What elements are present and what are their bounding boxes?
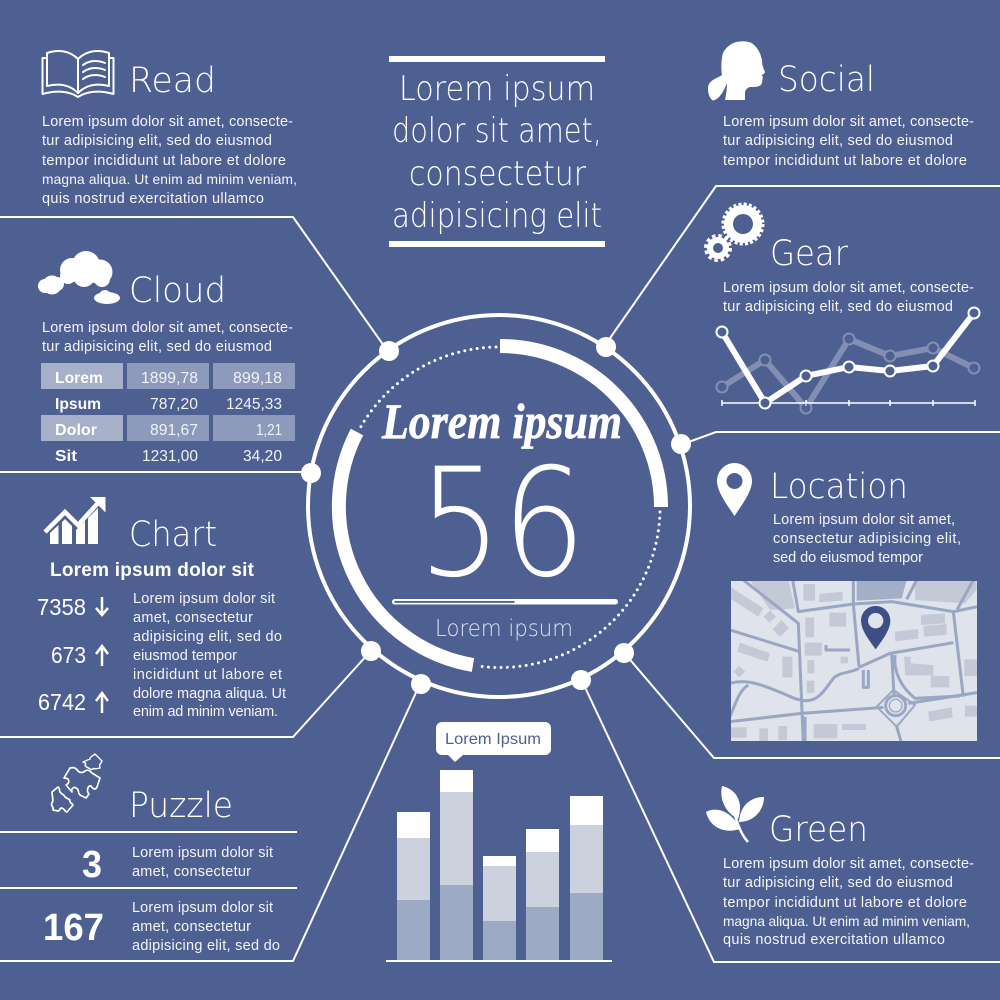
body text: chart: Lorem ipsum dolor sit — [133, 591, 275, 607]
icon: leaves — [706, 786, 764, 842]
body text: social: tempor incididunt ut labore et dolore — [723, 153, 967, 169]
stat: 3: 3 — [82, 844, 102, 886]
statistics with arrows: 7358 — [37, 594, 86, 620]
body text: read: tur adipisicing elit, sed do eiusmod — [42, 133, 272, 149]
data table: 891,67 — [150, 422, 198, 439]
progress bar — [392, 599, 618, 604]
body text: read: magna aliqua. Ut enim ad minim veniam, — [42, 172, 297, 187]
icon: gears — [706, 204, 762, 260]
body text: social — [723, 114, 974, 169]
title block: dolor sit amet, — [392, 111, 602, 151]
title block — [389, 56, 605, 247]
heading: chart: Chart — [129, 515, 217, 555]
gauge value: 56 — [418, 437, 586, 611]
gauge thick arcs — [339, 346, 661, 665]
body text: stat 3 — [132, 845, 273, 880]
data table: Ipsum — [55, 396, 101, 413]
data table: 1,21 — [256, 422, 282, 439]
title block: consectetur — [409, 154, 586, 194]
series: secondary — [716, 334, 980, 414]
icon: puzzle pieces — [51, 754, 102, 812]
icon: open book — [42, 51, 114, 97]
panel: chart — [37, 497, 286, 720]
icon: rising chart — [45, 497, 106, 544]
statistics with arrows — [37, 594, 108, 715]
body text: cloud: Lorem ipsum dolor sit amet, consecte- — [42, 320, 293, 336]
data table: 1231,00 — [142, 448, 198, 465]
title block: Lorem ipsum — [399, 69, 595, 109]
body text: green — [723, 856, 974, 948]
statistics with arrows: 6742 — [38, 689, 86, 715]
body text: gear: Lorem ipsum dolor sit amet, consecte- — [723, 280, 974, 296]
panel: location — [717, 463, 977, 743]
map pin — [861, 606, 890, 649]
data table: Sit — [55, 448, 78, 465]
gauge dotted arcs — [359, 347, 660, 668]
body text: stat 167: amet, consectetur — [132, 919, 251, 935]
body text: chart: adipisicing elit, sed do — [133, 629, 282, 645]
data table: 1245,33 — [226, 396, 282, 413]
subheading: chart: Lorem ipsum dolor sit — [50, 560, 255, 581]
heading: green: Green — [769, 810, 868, 850]
body text: cloud — [42, 320, 293, 355]
connector lines — [0, 186, 1000, 962]
body text: green: Lorem ipsum dolor sit amet, consecte- — [723, 856, 974, 872]
body text: location — [773, 512, 961, 566]
panel: cloud — [38, 251, 295, 465]
body text: location: sed do eiusmod tempor — [773, 550, 923, 566]
stacked bar chart — [386, 722, 612, 962]
stat: 167: 167 — [43, 907, 104, 949]
connector nodes — [301, 337, 691, 694]
data table: Lorem — [55, 370, 103, 387]
statistics with arrows: 673 — [51, 642, 86, 668]
heading: social: Social — [778, 60, 875, 100]
data table: 787,20 — [150, 396, 198, 413]
panel: green — [706, 786, 974, 948]
body text: chart: dolore magna aliqua. Ut — [133, 686, 286, 702]
heading: puzzle: Puzzle — [129, 786, 233, 826]
title block: adipisicing elit — [392, 196, 602, 236]
body text: green: quis nostrud exercitation ullamco — [723, 932, 945, 948]
bars — [397, 770, 603, 960]
body text: green: tempor incididunt ut labore et dolore — [723, 895, 967, 911]
icon: location pin — [717, 463, 752, 516]
line chart — [716, 308, 980, 414]
heading: gear: Gear — [770, 234, 849, 274]
map buildings — [730, 580, 977, 741]
panel: social — [708, 41, 974, 169]
data table: 34,20 — [243, 448, 282, 465]
body text: read: quis nostrud exercitation ullamco — [42, 191, 264, 207]
body text: chart: eiusmod tempor — [133, 648, 237, 664]
body text: location: consectetur adipisicing elit, — [773, 531, 961, 547]
body text: social: Lorem ipsum dolor sit amet, consecte- — [723, 114, 974, 130]
data table: 1899,78 — [141, 370, 198, 387]
body text: chart — [133, 591, 286, 720]
body text: stat 167: adipisicing elit, sed do — [132, 938, 280, 954]
tooltip — [436, 722, 551, 762]
panel: read — [42, 51, 297, 207]
body text: green: magna aliqua. Ut enim ad minim veniam, — [723, 914, 970, 929]
heading: read: Read — [129, 61, 216, 101]
icon: woman profile — [708, 41, 765, 100]
central gauge — [301, 315, 691, 697]
body text: stat 167: Lorem ipsum dolor sit — [132, 900, 273, 916]
body text: chart: incididunt ut labore et — [133, 667, 282, 683]
outer ring — [308, 315, 690, 697]
axis — [722, 400, 975, 406]
map — [730, 580, 977, 743]
data table: Dolor — [55, 422, 97, 439]
body text: cloud: tur adipisicing elit, sed do eiusmod — [42, 339, 272, 355]
body text: chart: amet, consectetur — [133, 610, 253, 626]
data table — [41, 363, 295, 465]
body text: gear: tur adipisicing elit, sed do eiusmod — [723, 299, 953, 315]
body text: stat 3: Lorem ipsum dolor sit — [132, 845, 273, 861]
body text: green: tur adipisicing elit, sed do eiusmod — [723, 875, 953, 891]
map roads — [730, 580, 977, 743]
gauge title: Lorem ipsum — [381, 393, 622, 449]
panel: gear — [706, 204, 980, 414]
body text: gear — [723, 280, 974, 315]
data table: 899,18 — [233, 370, 282, 387]
heading: cloud: Cloud — [129, 271, 226, 311]
series: primary — [716, 308, 980, 408]
chart baseline — [386, 960, 612, 962]
body text: chart: enim ad minim veniam. — [133, 704, 278, 720]
body text: read: Lorem ipsum dolor sit amet, consecte- — [42, 114, 293, 130]
body text: stat 167 — [132, 900, 280, 954]
gauge caption: Lorem ipsum — [435, 616, 573, 642]
body text: location: Lorem ipsum dolor sit amet, — [773, 512, 955, 528]
body text: read — [42, 114, 297, 207]
body text: read: tempor incididunt ut labore et dolore — [42, 153, 286, 169]
panel: puzzle — [43, 754, 280, 954]
body text: stat 3: amet, consectetur — [132, 864, 251, 880]
icon: clouds — [38, 251, 120, 304]
tooltip: Lorem Ipsum — [445, 731, 541, 748]
heading: location: Location — [770, 467, 908, 507]
body text: social: tur adipisicing elit, sed do eiusmod — [723, 133, 953, 149]
